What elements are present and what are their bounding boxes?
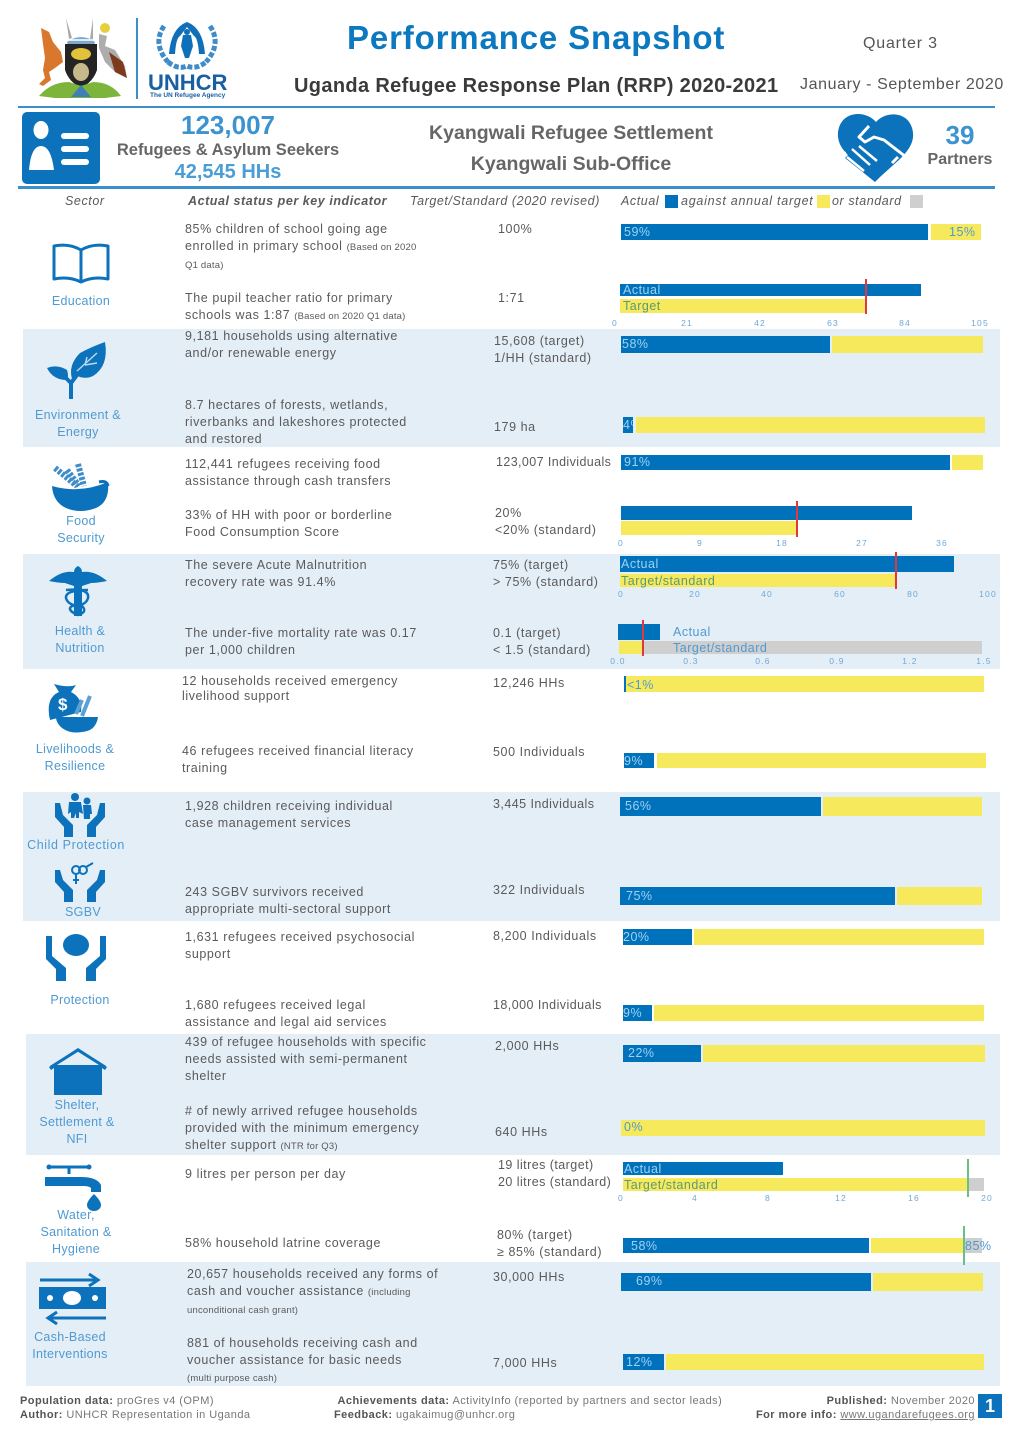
legend: against annual target xyxy=(681,194,814,208)
sector: Cash-Based Interventions: Cash-Based xyxy=(34,1330,106,1344)
legend: Actual xyxy=(621,194,659,208)
bar: latrine xyxy=(623,1226,993,1265)
bar: basic needs xyxy=(623,1354,984,1370)
chart: food consumption: 36 xyxy=(936,538,948,548)
sector: SGBV: SGBV xyxy=(65,905,101,919)
indicator: energy: 9,181 households using alternative xyxy=(185,329,398,343)
chart: malnutrition: Actual xyxy=(621,557,659,571)
indicator: pupil teacher ratio: The pupil teacher ratio for primary xyxy=(185,291,393,305)
footer: center: Feedback: ugakaimug@unhcr.org xyxy=(334,1409,515,1421)
bar: enrolment: 59% xyxy=(624,225,651,239)
bar: enrolment: 15% xyxy=(949,225,976,239)
page number xyxy=(978,1394,1002,1418)
chart: mortality: Target/standard xyxy=(673,641,767,655)
chart: pupil teacher ratio: 84 xyxy=(899,318,911,328)
sector: Shelter xyxy=(30,1047,120,1147)
bar: livelihood support xyxy=(624,676,984,692)
indicator: malnutrition: recovery rate was 91.4% xyxy=(185,575,336,589)
target: food consumption xyxy=(495,506,596,537)
footer: left: Population data: proGres v4 (OPM) xyxy=(20,1395,214,1407)
bar: emergency shelter xyxy=(621,1120,985,1136)
bar: case management: 56% xyxy=(625,799,652,813)
indicator: financial literacy: training xyxy=(182,761,228,775)
chart: mortality: 0.6 xyxy=(755,656,771,666)
indicator: livelihood support: 12 households received emergency xyxy=(182,674,398,688)
target: food individuals: 123,007 Individuals xyxy=(496,455,611,469)
sector: WASH: Sanitation & xyxy=(40,1225,112,1239)
target: latrine: 80% (target) xyxy=(497,1228,573,1242)
bar: case management xyxy=(620,797,982,816)
chart: pupil teacher ratio: 0 xyxy=(612,318,618,328)
sector: Livelihoods & Resilience: Resilience xyxy=(45,759,105,773)
indicator: forests: and restored xyxy=(185,432,262,446)
quarter: Quarter 3 xyxy=(863,35,938,52)
sector: WASH xyxy=(30,1164,120,1258)
bar: livelihood support: <1% xyxy=(627,678,654,692)
bar: food assistance xyxy=(621,455,983,470)
sector: Protection xyxy=(40,934,120,1009)
target: food consumption: <20% (standard) xyxy=(495,523,596,537)
indicator: enrolment xyxy=(185,222,416,271)
bar: SGBV xyxy=(620,887,982,905)
target: legal: 18,000 Individuals xyxy=(493,998,602,1012)
indicator: semi-permanent shelter: needs assisted with semi-permanent xyxy=(185,1052,408,1066)
bar: food assistance: 91% xyxy=(624,455,651,469)
legend: or standard xyxy=(832,194,902,208)
indicator: emergency shelter xyxy=(185,1103,419,1155)
band: cash xyxy=(26,1262,1000,1386)
logo: UNHCR: UNHCR xyxy=(148,70,227,95)
target: cash: 30,000 HHs xyxy=(493,1270,565,1284)
sector: Food Security xyxy=(52,463,110,545)
bar: psychosocial: 20% xyxy=(623,930,650,944)
sector: SGBV xyxy=(50,862,110,920)
target: litres: 20 litres (standard) xyxy=(498,1175,611,1189)
indicator: cash for food: 112,441 refugees receiving food xyxy=(185,457,381,471)
indicator: SGBV support: 243 SGBV survivors received xyxy=(185,885,364,899)
target: SGBV: 322 Individuals xyxy=(493,883,585,897)
bar: cash xyxy=(621,1273,983,1291)
chart: malnutrition: 0 xyxy=(618,589,624,599)
bar: latrine: 85% xyxy=(965,1239,992,1253)
indicator: emergency shelter: shelter support (NTR for Q3) xyxy=(185,1138,338,1152)
header rule top xyxy=(18,106,995,108)
chart: malnutrition: 100 xyxy=(979,589,997,599)
chart: mortality: 1.2 xyxy=(902,656,918,666)
partners stat: 39 xyxy=(946,120,974,150)
footer: left: Author: UNHCR Representation in Uganda xyxy=(20,1409,250,1421)
indicator: livelihood support: livelihood support xyxy=(182,689,290,703)
chart: food consumption xyxy=(618,501,948,548)
sector: Health & Nutrition xyxy=(49,566,107,655)
band: shelter xyxy=(26,1034,1000,1155)
indicator: cash and voucher xyxy=(187,1266,438,1319)
chart: mortality: 0.9 xyxy=(829,656,845,666)
indicator: SGBV support: appropriate multi-sectoral support xyxy=(185,902,391,916)
sector: Shelter: Shelter, xyxy=(55,1098,99,1112)
bar: cash: 69% xyxy=(636,1274,663,1288)
indicator: basic needs cash: 881 of households receiving cash and xyxy=(187,1336,418,1350)
footer: right xyxy=(756,1394,975,1422)
bar: emergency shelter: 0% xyxy=(624,1120,643,1134)
indicator: forests: 8.7 hectares of forests, wetlands, xyxy=(185,398,388,412)
sector: Shelter: Settlement & xyxy=(39,1115,115,1129)
sector: Health & Nutrition: Health & xyxy=(55,624,105,638)
chart: litres: Target/standard xyxy=(624,1178,718,1192)
chart: mortality: 0.0 xyxy=(610,656,626,666)
chart: litres: 8 xyxy=(765,1193,771,1203)
indicator: legal assistance xyxy=(185,997,387,1031)
indicator: semi-permanent shelter: shelter xyxy=(185,1069,227,1083)
chart: malnutrition: 40 xyxy=(761,589,773,599)
chart: pupil teacher ratio xyxy=(612,279,989,328)
indicator: case management: 1,928 children receiving individual xyxy=(185,799,393,813)
chart: food consumption: 0 xyxy=(618,538,624,548)
indicator: cash and voucher: unconditional cash grant) xyxy=(187,1305,298,1316)
indicator: forests: riverbanks and lakeshores protected xyxy=(185,415,407,429)
indicator: latrine coverage: 58% household latrine coverage xyxy=(185,1236,381,1250)
target: 1:71: 1:71 xyxy=(498,291,525,305)
chart: malnutrition: 60 xyxy=(834,589,846,599)
indicator: energy xyxy=(185,329,398,360)
target: malnutrition: > 75% (standard) xyxy=(493,575,599,589)
target: litres: 19 litres (target) xyxy=(498,1158,594,1172)
indicator: legal assistance: assistance and legal aid services xyxy=(185,1015,387,1029)
sector: Child Protection xyxy=(27,793,125,852)
indicator: energy: and/or renewable energy xyxy=(185,346,337,360)
chart: mortality: 0.3 xyxy=(683,656,699,666)
title: Performance Snapshot xyxy=(347,19,725,56)
indicator: under-five mortality: per 1,000 children xyxy=(185,643,296,657)
target: malnutrition: 75% (target) xyxy=(493,558,569,572)
logo divider xyxy=(136,18,138,99)
population stat: 42,545 HHs xyxy=(175,161,281,183)
chart: food consumption: 9 xyxy=(697,538,703,548)
indicator: cash for food xyxy=(185,457,391,488)
chart: malnutrition: Target/standard xyxy=(621,574,715,588)
chart: pupil teacher ratio: 105 xyxy=(971,318,989,328)
sector: Child Protection: Child Protection xyxy=(27,838,125,852)
indicator: livelihood support xyxy=(182,674,398,703)
sector: Livelihoods & Resilience: $ xyxy=(58,695,68,714)
target: mortality: < 1.5 (standard) xyxy=(493,643,591,657)
logo: Uganda coat of arms xyxy=(39,18,127,98)
sector: Shelter: NFI xyxy=(66,1132,88,1146)
sector: Education: Education xyxy=(52,294,110,308)
chart: litres: 12 xyxy=(835,1193,847,1203)
bar: shelter: 22% xyxy=(628,1046,655,1060)
footer: center: Achievements data: ActivityInfo (reported by partners and sector leads) xyxy=(338,1395,722,1407)
chart: litres xyxy=(615,1159,1000,1205)
sector: Environment & Energy: Energy xyxy=(57,425,99,439)
chart: litres: 0 xyxy=(618,1193,624,1203)
bar: enrolment xyxy=(621,224,981,240)
partners stat: Partners xyxy=(928,151,992,168)
sector: Environment & Energy: Environment & xyxy=(35,408,121,422)
chart: litres: Actual xyxy=(624,1162,662,1176)
bar: SGBV: 75% xyxy=(626,889,653,903)
target: shelter: 2,000 HHs xyxy=(495,1039,559,1053)
chart: pupil teacher ratio: 42 xyxy=(754,318,766,328)
indicator: financial literacy: 46 refugees received financial literacy xyxy=(182,744,414,758)
indicator: cash and voucher: cash and voucher assistance (including xyxy=(187,1284,411,1298)
icon: handshake heart xyxy=(838,114,914,182)
indicator: food consumption: 33% of HH with poor or borderline xyxy=(185,508,392,522)
footer: right: Published: November 2020 xyxy=(827,1395,975,1407)
chart: malnutrition: 80 xyxy=(907,589,919,599)
bar: psychosocial xyxy=(623,929,984,945)
chart: litres: 16 xyxy=(908,1193,920,1203)
target: litres xyxy=(498,1157,611,1191)
band: environment xyxy=(23,329,1000,447)
footer: left xyxy=(20,1394,250,1422)
sector: Food Security: Security xyxy=(57,531,105,545)
target: latrine xyxy=(497,1227,602,1261)
indicator: emergency shelter: provided with the minimum emergency xyxy=(185,1121,419,1135)
indicator: enrolment: 85% children of school going age xyxy=(185,222,388,236)
indicator: food consumption: Food Consumption Score xyxy=(185,525,340,539)
indicator: malnutrition: The severe Acute Malnutrition xyxy=(185,558,367,572)
indicator: under-five mortality xyxy=(185,626,417,657)
logo: UNHCR xyxy=(148,22,227,99)
population stat xyxy=(117,110,339,183)
subtitle: Uganda Refugee Response Plan (RRP) 2020-2021 xyxy=(294,75,778,97)
sector: Health & Nutrition: Nutrition xyxy=(55,641,105,655)
indicator: enrolment: Q1 data) xyxy=(185,260,224,271)
band: health xyxy=(23,554,1000,669)
bar: financial literacy: 9% xyxy=(624,754,643,768)
chart: pupil teacher ratio: 21 xyxy=(681,318,693,328)
indicator: SGBV support xyxy=(185,884,391,918)
target: case management: 3,445 Individuals xyxy=(493,797,594,811)
sector: Cash-Based Interventions: Interventions xyxy=(32,1347,108,1361)
target: energy: 15,608 (target) xyxy=(494,334,585,348)
indicator: semi-permanent shelter xyxy=(185,1034,427,1085)
bar: energy xyxy=(621,336,983,353)
indicator: psychosocial xyxy=(185,929,415,963)
indicator: basic needs cash: voucher assistance for basic needs xyxy=(187,1353,402,1367)
indicator: pupil teacher ratio: schools was 1:87 (Based on 2020 Q1 data) xyxy=(185,308,406,322)
indicator: cash and voucher: 20,657 households received any forms of xyxy=(187,1267,438,1281)
chart: pupil teacher ratio: Actual xyxy=(623,283,661,297)
target: food consumption: 20% xyxy=(495,506,522,520)
chart: pupil teacher ratio: Target xyxy=(623,299,661,313)
bar: energy: 58% xyxy=(622,337,649,351)
target: malnutrition xyxy=(493,558,599,589)
indicator: food consumption xyxy=(185,508,392,539)
column header: sector: Sector xyxy=(65,194,105,208)
bar: financial literacy xyxy=(624,753,986,768)
indicator: case management xyxy=(185,799,393,830)
logo: UNHCR: The UN Refugee Agency xyxy=(150,92,225,99)
target: latrine: ≥ 85% (standard) xyxy=(497,1245,602,1259)
chart: pupil teacher ratio: 63 xyxy=(827,318,839,328)
period: January - September 2020 xyxy=(800,76,1004,93)
target: energy: 1/HH (standard) xyxy=(494,351,592,365)
target: 100%: 100% xyxy=(498,222,532,236)
sector: Cash-Based Interventions xyxy=(25,1274,115,1364)
target: mortality xyxy=(493,626,591,657)
indicator: under-five mortality: The under-five mortality rate was 0.17 xyxy=(185,626,417,640)
indicator: semi-permanent shelter: 439 of refugee households with specific xyxy=(185,1035,427,1049)
column header: indicator: Actual status per key indicator xyxy=(188,194,387,208)
sector: Food Security: Food xyxy=(66,514,96,528)
population stat: Refugees & Asylum Seekers xyxy=(117,141,339,159)
bar: forests xyxy=(623,417,985,433)
bar: legal: 9% xyxy=(623,1006,642,1020)
chart: malnutrition xyxy=(618,552,997,599)
bar: legal xyxy=(623,1005,984,1021)
indicator: case management: case management services xyxy=(185,816,351,830)
target: livelihood: 12,246 HHs xyxy=(493,676,565,690)
sector: Education xyxy=(52,244,110,308)
chart: malnutrition: 20 xyxy=(689,589,701,599)
chart: mortality xyxy=(610,620,992,666)
target: emergency shelter: 640 HHs xyxy=(495,1125,548,1139)
indicator: emergency shelter: # of newly arrived refugee households xyxy=(185,1104,418,1118)
indicator: basic needs cash xyxy=(187,1335,418,1387)
sector: WASH: Hygiene xyxy=(52,1242,100,1256)
population stat: 123,007 xyxy=(181,110,275,140)
indicator: enrolment: enrolled in primary school (Based on 2020 xyxy=(185,239,416,253)
icon: person id card xyxy=(22,112,100,184)
footer: right: For more info: www.ugandarefugees.org xyxy=(756,1409,975,1421)
bar: shelter xyxy=(623,1045,985,1062)
band: child protection and SGBV xyxy=(23,792,1000,921)
sector: Protection: Protection xyxy=(50,993,110,1007)
target: energy xyxy=(494,334,592,365)
bar: latrine: 58% xyxy=(631,1239,658,1253)
chart: litres: 20 xyxy=(981,1193,993,1203)
indicator: forests xyxy=(185,398,407,446)
target: basic needs: 7,000 HHs xyxy=(493,1356,557,1370)
target: psychosocial: 8,200 Individuals xyxy=(493,929,597,943)
partners stat xyxy=(928,120,992,168)
indicator: malnutrition xyxy=(185,558,367,589)
target: financial literacy: 500 Individuals xyxy=(493,745,585,759)
chart: food consumption: 27 xyxy=(856,538,868,548)
footer: center xyxy=(334,1394,722,1422)
indicator: basic needs cash: (multi purpose cash) xyxy=(187,1373,277,1384)
target: mortality: 0.1 (target) xyxy=(493,626,561,640)
settlement name: Kyangwali Refugee Settlement xyxy=(429,122,713,144)
indicator: financial literacy xyxy=(182,744,414,775)
page number: 1 xyxy=(985,1396,995,1416)
indicator: cash for food: assistance through cash transfers xyxy=(185,474,391,488)
indicator: legal assistance: 1,680 refugees received legal xyxy=(185,998,366,1012)
header rule bottom xyxy=(18,186,995,189)
settlement name xyxy=(429,122,713,175)
indicator: pupil teacher ratio xyxy=(185,291,406,322)
chart: litres: 4 xyxy=(692,1193,698,1203)
settlement name: Kyangwali Sub-Office xyxy=(471,153,671,175)
sector: Environment & Energy xyxy=(35,342,121,439)
indicator: psychosocial: 1,631 refugees received psychosocial xyxy=(185,930,415,944)
indicator: psychosocial: support xyxy=(185,947,231,961)
legend xyxy=(620,194,923,208)
sector: Livelihoods & Resilience: Livelihoods & xyxy=(36,742,114,756)
target: hectares: 179 ha xyxy=(494,420,536,434)
sector: Livelihoods & Resilience xyxy=(36,684,114,773)
chart: food consumption: 18 xyxy=(776,538,788,548)
chart: mortality: 1.5 xyxy=(976,656,992,666)
column header: target: Target/Standard (2020 revised) xyxy=(410,194,600,208)
bar: basic needs: 12% xyxy=(626,1355,653,1369)
chart: mortality: Actual xyxy=(673,625,711,639)
sector: WASH: Water, xyxy=(57,1208,95,1222)
indicator: litres per person: 9 litres per person per day xyxy=(185,1167,346,1181)
